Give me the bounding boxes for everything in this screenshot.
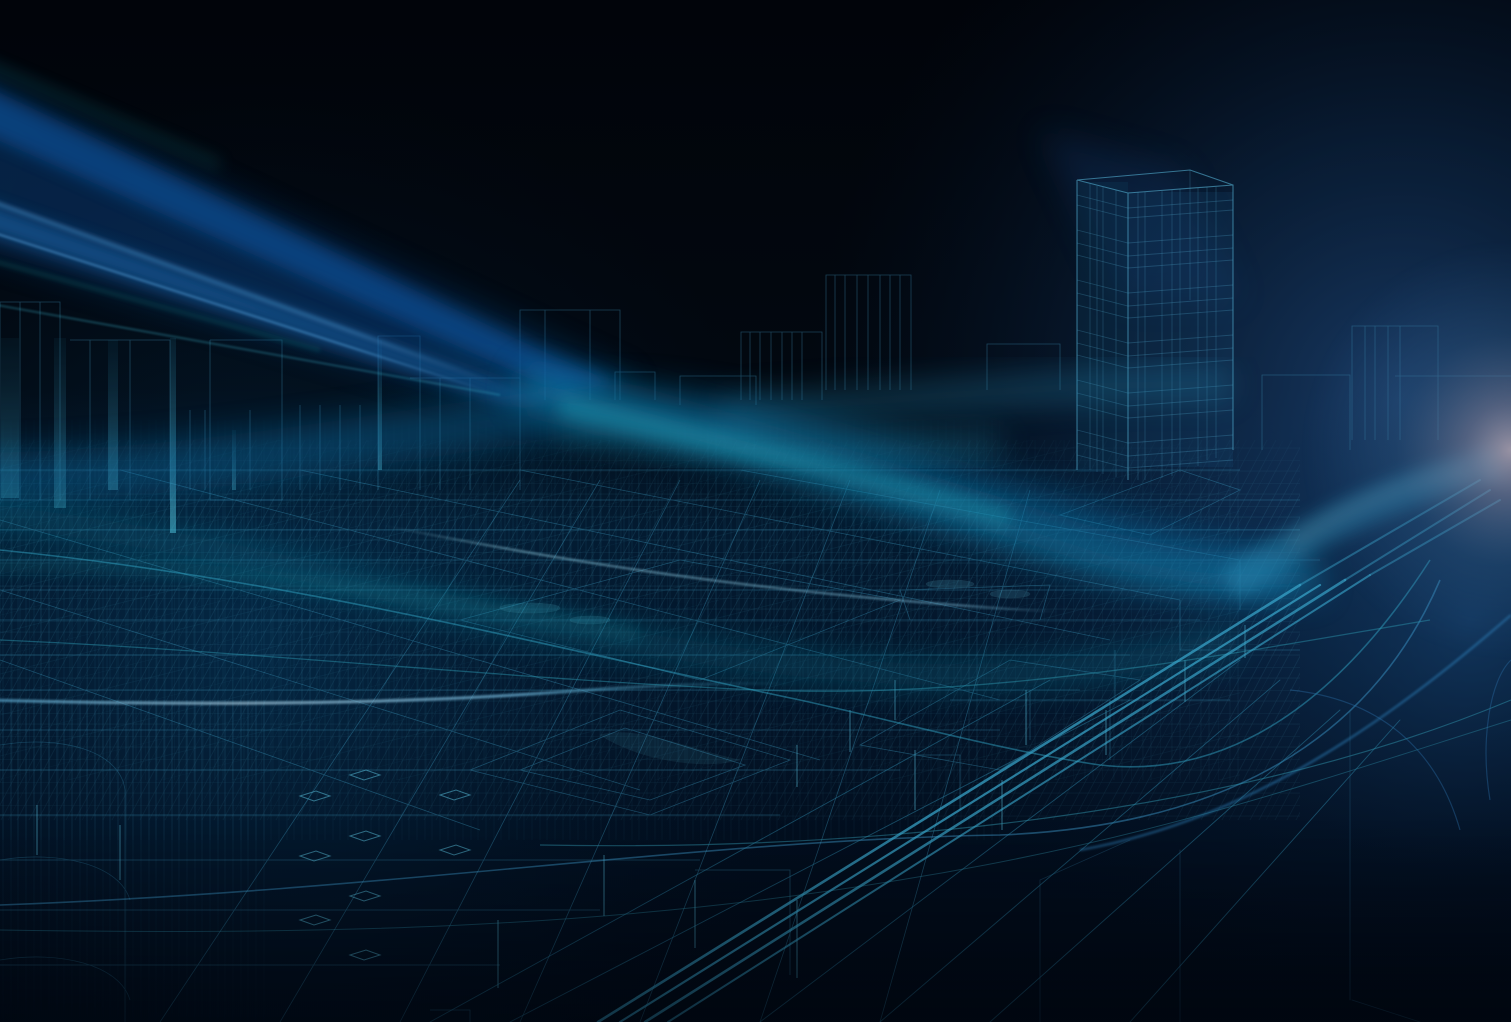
bright curves: thin glowing streaks [0, 525, 1511, 932]
wireframe tower [1077, 170, 1233, 480]
light stream: wide blue beams from upper left [0, 45, 640, 410]
small blocks: ground markers and posts [37, 625, 1245, 988]
city ground grid: perspective wire lines [0, 470, 1320, 1022]
vignette: darkened bottom edge [0, 820, 1511, 1022]
fine lattice: dense blueprint texture [0, 440, 1300, 896]
wireframe skyline: background buildings [0, 275, 1511, 500]
left colonnade: bright vertical bars [1, 338, 382, 533]
light stream: teal wave across the centre [0, 385, 1500, 675]
surface meshes: contoured wire details [500, 580, 1030, 764]
elevated rail: bright bundled tracks [430, 480, 1500, 1022]
light source: glow at the right horizon [1280, 230, 1511, 660]
